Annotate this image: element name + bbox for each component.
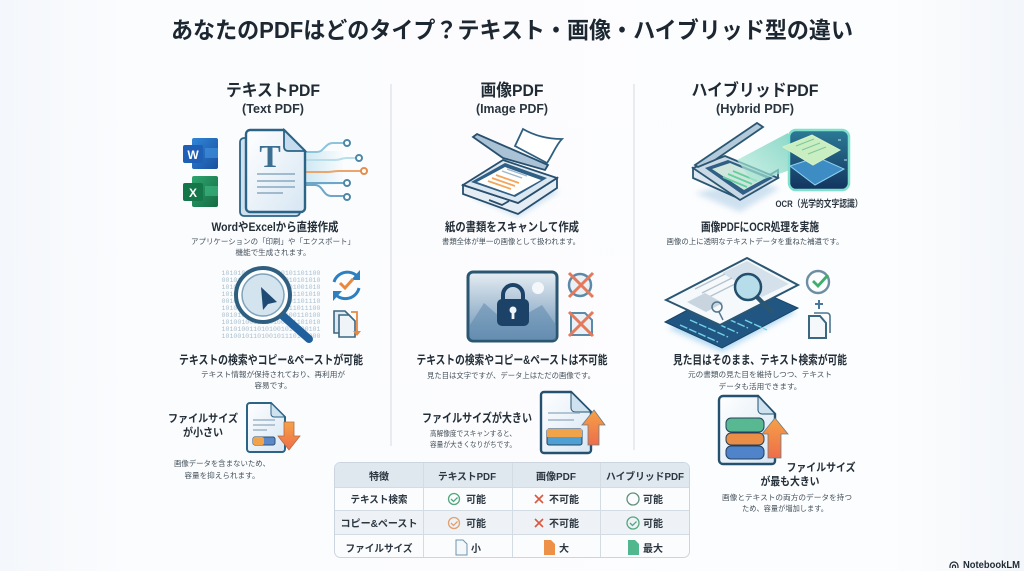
heading: image PDF: (Image PDF)	[476, 101, 548, 116]
text block: large file size	[422, 410, 532, 449]
table header: ハイブリッドPDF	[606, 470, 684, 483]
text block: largest file size: ため、容量が増加します。	[742, 503, 828, 513]
title: あなたのPDFはどのタイプ？テキスト・画像・ハイブリッド型の違い	[171, 17, 853, 43]
text block: creation: WordやExcelから直接作成	[212, 219, 338, 234]
icon: sync check and copy	[333, 270, 361, 337]
text block: search impossible: テキストの検索やコピー&ペーストは不可能	[416, 352, 608, 367]
icon: text document with data wires	[240, 130, 367, 216]
table header: 特徴	[369, 470, 389, 483]
row: copy and paste: 不可能	[549, 517, 579, 530]
icon: large file with up arrow	[541, 392, 605, 453]
text block: search and copy: テキストの検索やコピー&ペーストが可能	[179, 352, 363, 367]
text block: small file size	[168, 411, 238, 439]
text block: search impossible: 見た目は文字ですが、データ上はただの画像です。	[427, 370, 595, 380]
text block: search and copy: 容易です。	[254, 380, 292, 390]
text block: small file size description	[174, 458, 270, 480]
row: text search: 可能	[643, 493, 663, 506]
row: file size: ファイルサイズ	[346, 542, 412, 555]
text block: search and copy	[179, 352, 363, 390]
icon: binary text with magnifier: 1010100101001100101101100	[222, 270, 320, 277]
text block: searchable: データも活用できます。	[719, 381, 801, 391]
icon: small file with down arrow	[247, 403, 300, 452]
row: copy and paste	[340, 517, 663, 530]
icon: binary text with magnifier: 0010100110100101101101110	[222, 298, 320, 305]
text block: scanned: 書類全体が単一の画像として扱われます。	[442, 236, 580, 246]
comparison table	[334, 462, 690, 558]
heading: text PDF: (Text PDF)	[242, 101, 304, 116]
row: file size	[346, 540, 663, 555]
text block: small file size description: 容量を抑えられます。	[184, 470, 260, 480]
table header: 画像PDF	[536, 470, 576, 483]
heading: text PDF: テキストPDF	[226, 81, 320, 100]
icon: binary text with magnifier: 1010010110100101110101000	[222, 333, 320, 340]
row: copy and paste: 可能	[466, 517, 486, 530]
text block: OCR processing: 画像PDFにOCR処理を実施	[701, 219, 819, 234]
panel: text PDF	[168, 81, 367, 480]
icon: scanner with OCR	[693, 123, 849, 212]
text block: OCR processing: 画像の上に透明なテキストデータを重ねた補遺です。	[666, 236, 844, 246]
row: file size: 大	[559, 542, 569, 555]
text block: large file size: 高解像度でスキャンすると、	[430, 428, 516, 438]
panel: hybrid PDF	[665, 80, 862, 513]
heading: hybrid PDF: (Hybrid PDF)	[716, 101, 794, 116]
icon: binary text with magnifier: 1010010011010100101101010	[222, 319, 320, 326]
text block: creation: 機能で生成されます。	[235, 247, 311, 257]
text block: largest file size: 画像とテキストの両方のデータを持つ	[722, 492, 852, 502]
text block: large file size: ファイルサイズが大きい	[422, 410, 532, 425]
row: copy and paste: コピー&ペースト	[340, 518, 418, 530]
heading: hybrid PDF	[692, 80, 818, 116]
text block: largest file size	[722, 460, 856, 513]
label: OCR: OCR（光学的文字認識）	[776, 198, 862, 210]
icon: search and copy unavailable	[569, 273, 593, 336]
row: text search	[350, 493, 663, 506]
text block: OCR processing	[666, 219, 844, 246]
row: file size: 最大	[643, 542, 663, 555]
text block: largest file size: ファイルサイズ	[786, 460, 856, 474]
text block: search and copy: テキスト情報が保持されており、再利用が	[201, 369, 345, 379]
table header	[369, 470, 684, 483]
text block: searchable: 見た目はそのまま、テキスト検索が可能	[673, 352, 847, 367]
text block: scanned	[442, 219, 580, 246]
row: text search: 可能	[466, 493, 486, 506]
icon: binary text with magnifier: 1010010110100110001001010	[222, 284, 320, 291]
text block: large file size: 容量が大きくなりがちです。	[430, 439, 516, 449]
icon: layered document with magnifier	[665, 258, 798, 352]
icon: binary text with magnifier: 1010110100101101011011100	[222, 305, 320, 312]
text block: creation: アプリケーションの「印刷」や「エクスポート」	[191, 236, 355, 246]
icon: locked image	[468, 272, 557, 341]
icon: binary text with magnifier: 1010100110101001010100101	[222, 326, 320, 333]
icon: binary text with magnifier: 1010101001101011011101010	[222, 291, 320, 298]
icon: Word	[183, 138, 218, 169]
panel: image PDF	[416, 81, 608, 453]
icon: check plus copy	[807, 271, 830, 338]
heading: hybrid PDF: ハイブリッドPDF	[692, 80, 818, 100]
text block: largest file size: が最も大きい	[760, 474, 820, 488]
icon: binary text with magnifier	[222, 268, 320, 340]
icon: binary text with magnifier: 0010100101101010100110100	[222, 312, 320, 319]
text block: searchable: 元の書類の見た目を維持しつつ、テキスト	[688, 369, 832, 379]
icon: database file with up arrow	[719, 396, 788, 464]
row: text search: 不可能	[549, 493, 579, 506]
row: text search: テキスト検索	[350, 493, 408, 506]
icon: binary text with magnifier: 0010110101101001010101010	[222, 277, 320, 284]
table header: テキストPDF	[438, 471, 496, 483]
heading: text PDF	[226, 81, 320, 116]
icon: Excel: X	[189, 186, 197, 200]
icon: flatbed scanner	[463, 129, 562, 217]
heading: image PDF	[476, 81, 548, 116]
text block: searchable	[673, 352, 847, 391]
text block: small file size description: 画像データを含まないため、	[174, 458, 270, 468]
heading: image PDF: 画像PDF	[480, 81, 544, 100]
text block: small file size: ファイルサイズ	[168, 411, 238, 425]
text block: scanned: 紙の書類をスキャンして作成	[445, 219, 579, 234]
icon: Excel	[183, 176, 218, 207]
text block: search impossible	[416, 352, 608, 380]
icon: Word: W	[187, 148, 199, 162]
row: copy and paste: 可能	[643, 517, 663, 530]
text block: creation	[191, 219, 355, 257]
text block: small file size: が小さい	[183, 425, 223, 439]
row: file size: 小	[471, 542, 481, 555]
icon: text document with data wires: T	[259, 138, 281, 174]
